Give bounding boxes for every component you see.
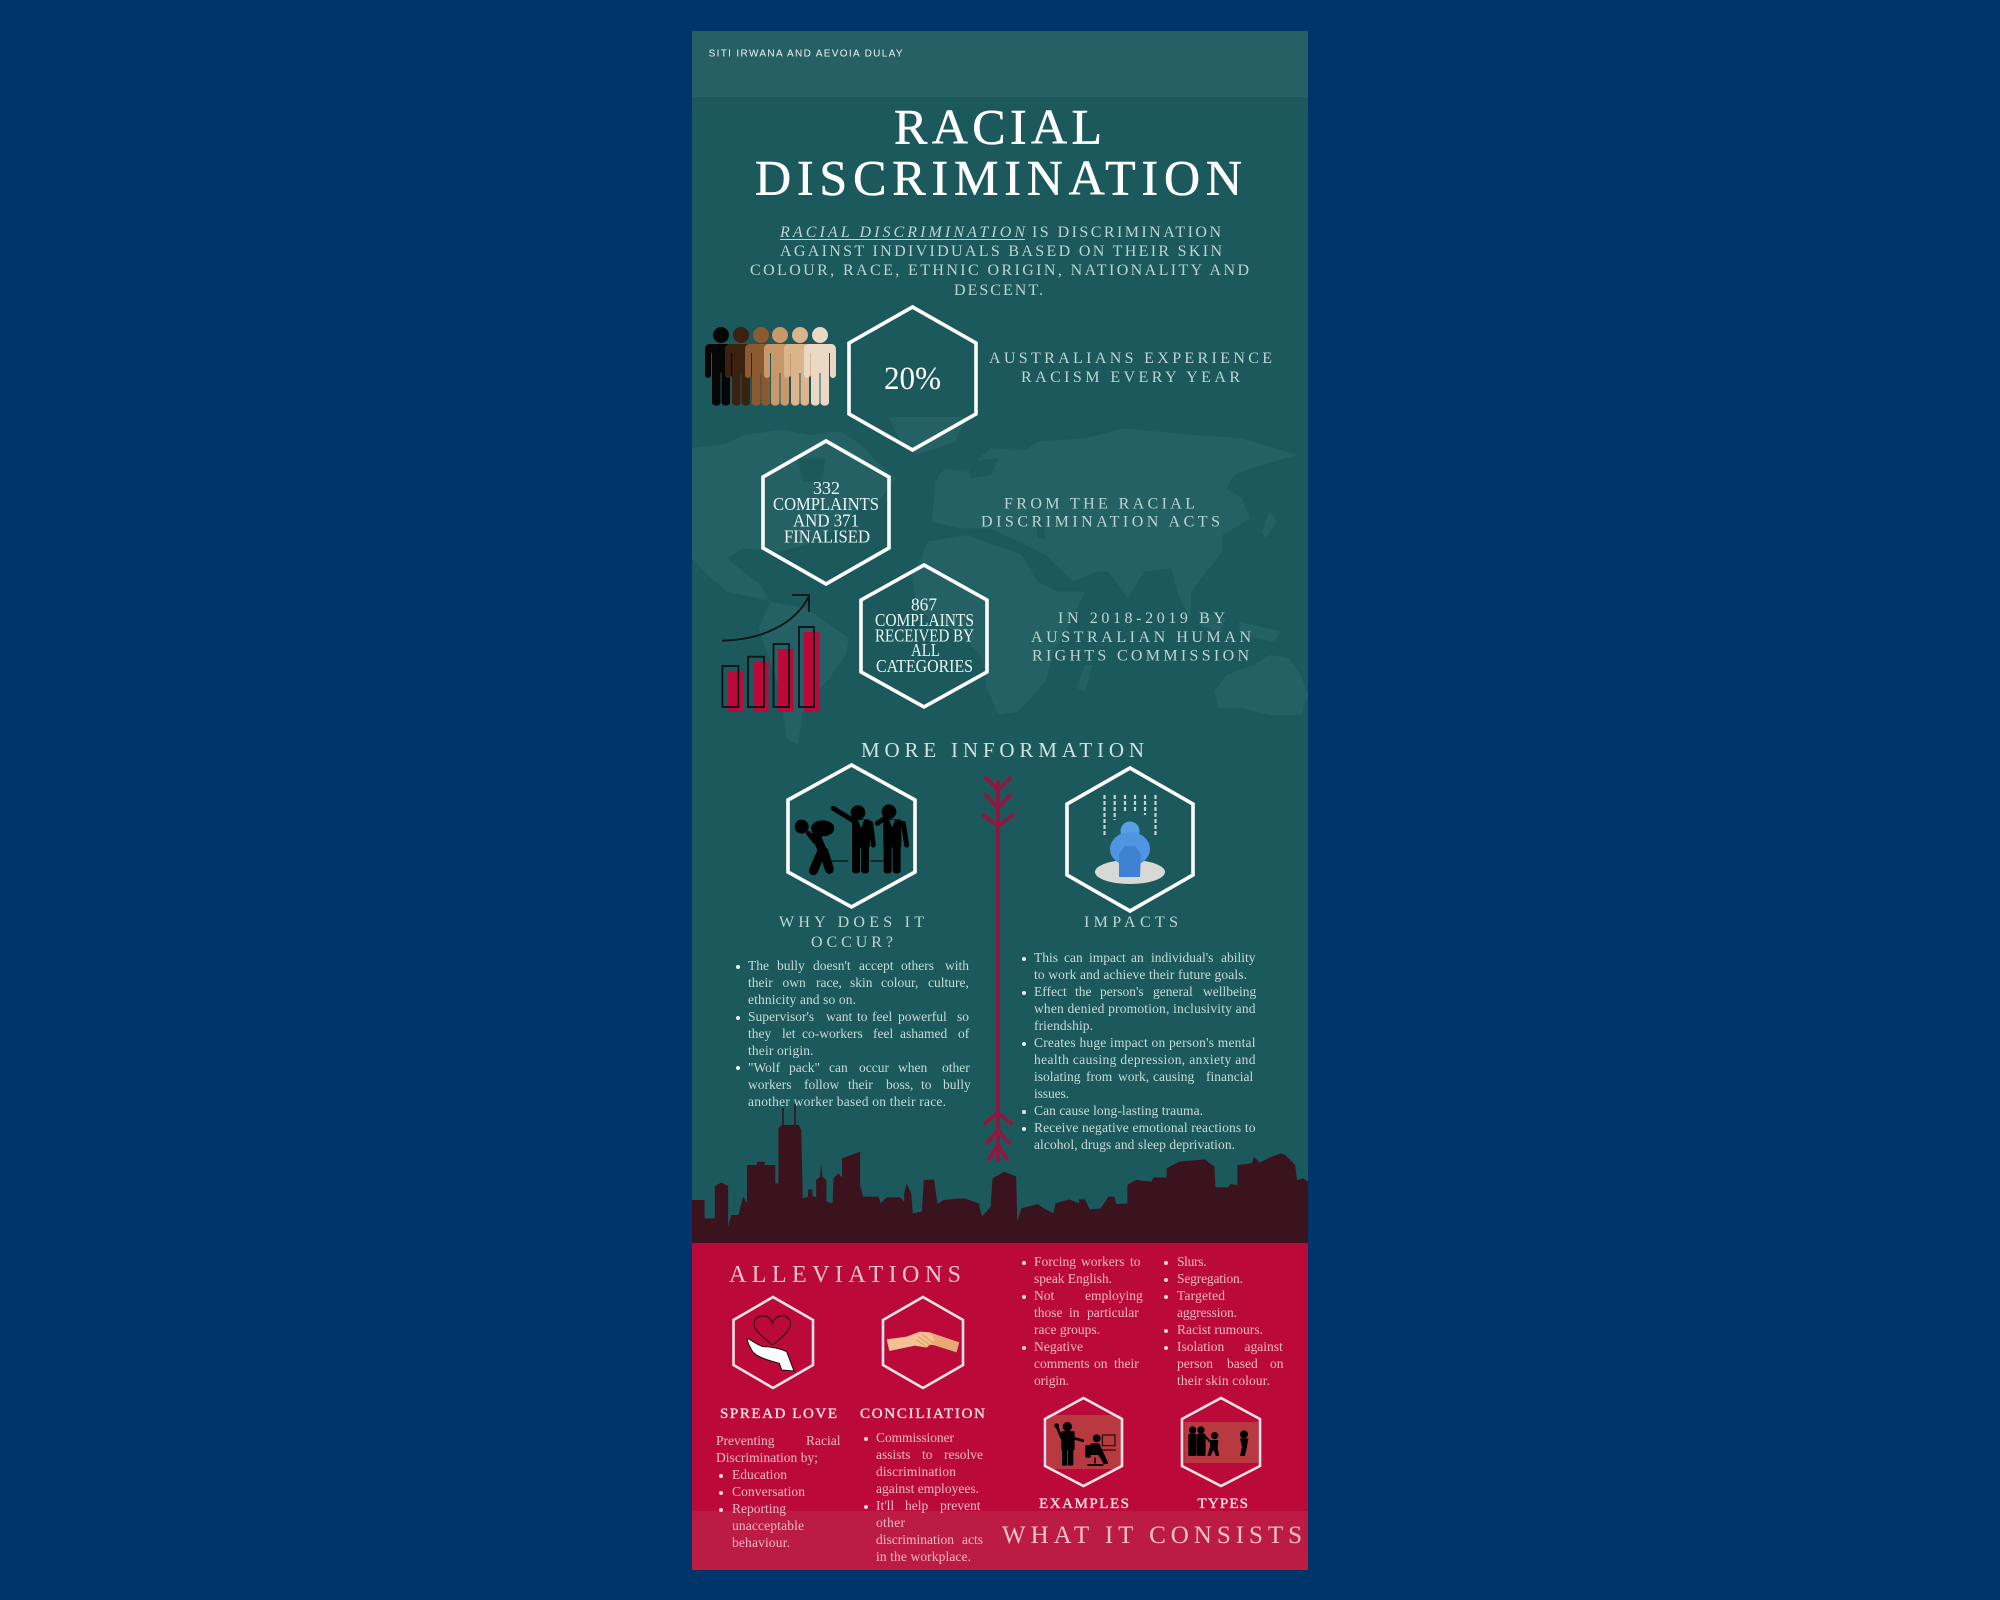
text: preventing racial discrimination: Discrimination by; bbox=[716, 1450, 818, 1465]
list: why does it occur: to bbox=[857, 1009, 868, 1024]
hexagon: 867 complaints: 867 bbox=[911, 594, 937, 614]
list: why does it occur: ashamed bbox=[900, 1026, 947, 1041]
list: conciliation: assists bbox=[876, 1447, 911, 1462]
icon: handshake bbox=[887, 1332, 959, 1352]
list: why does it occur: so bbox=[957, 1009, 969, 1024]
list: why does it occur: skin bbox=[850, 975, 873, 990]
icon: worker and boss bbox=[1054, 1422, 1116, 1466]
list: types: Isolation bbox=[1177, 1339, 1224, 1354]
heading: spread love: SPREAD LOVE bbox=[720, 1406, 837, 1422]
list: types: Racist rumours. bbox=[1177, 1322, 1263, 1337]
list: why does it occur: their bbox=[848, 1077, 873, 1092]
header band bbox=[692, 31, 1308, 97]
Madagascar bbox=[1077, 665, 1093, 692]
heading: more information: MORE INFORMATION bbox=[861, 738, 1144, 762]
hexagon icon: examples bbox=[1045, 1398, 1122, 1486]
label: from the acts: FROM THE RACIAL bbox=[1004, 496, 1195, 512]
list: why does it occur: feel bbox=[872, 1009, 892, 1024]
list: why does it occur: occur bbox=[859, 1060, 889, 1075]
list: conciliation: resolve bbox=[944, 1447, 983, 1462]
authors: SITI IRWANA AND AEVOIA DULAY bbox=[709, 48, 903, 60]
hexagon: 867 complaints: COMPLAINTS bbox=[875, 610, 974, 630]
list: why does it occur: pack" bbox=[789, 1060, 820, 1075]
list: why does it occur: powerful bbox=[898, 1009, 947, 1024]
world map bbox=[692, 417, 1308, 745]
hexagon: 332 complaints: AND 371 bbox=[793, 510, 859, 530]
text: preventing racial discrimination: Reporting bbox=[732, 1501, 786, 1516]
list: impacts: work, bbox=[1118, 1069, 1149, 1084]
hexagon: 332 complaints bbox=[763, 441, 889, 584]
list: impacts: individual's bbox=[1151, 950, 1213, 965]
list: types bbox=[1164, 1254, 1284, 1388]
list: examples: race groups. bbox=[1034, 1322, 1100, 1337]
Greenland bbox=[888, 417, 967, 455]
label: Australians experience racism bbox=[989, 350, 1272, 386]
list: impacts: when denied promotion, inclusivity and bbox=[1034, 1001, 1256, 1016]
list: conciliation: It'll bbox=[876, 1498, 894, 1513]
list: why does it occur: The bbox=[748, 958, 769, 973]
list: why does it occur: race, bbox=[816, 975, 842, 990]
list: impacts: This bbox=[1034, 950, 1058, 965]
list: impacts: general bbox=[1153, 984, 1193, 999]
Japan bbox=[1262, 512, 1277, 538]
red bars bbox=[728, 632, 820, 712]
Africa bbox=[912, 535, 1085, 715]
list: why does it occur: bully bbox=[777, 958, 805, 973]
list: impacts: wellbeing bbox=[1203, 984, 1256, 999]
list: types: their skin colour. bbox=[1177, 1373, 1270, 1388]
list: examples: to bbox=[1130, 1254, 1141, 1269]
list: examples: workers bbox=[1081, 1254, 1124, 1269]
list: conciliation: in the workplace. bbox=[876, 1549, 971, 1564]
icon: heart and hand bbox=[747, 1316, 794, 1371]
list: conciliation bbox=[864, 1430, 983, 1564]
text: preventing racial discrimination: Education bbox=[732, 1467, 787, 1482]
list: examples: those bbox=[1034, 1305, 1063, 1320]
list: examples: Not bbox=[1034, 1288, 1054, 1303]
heading: alleviations: ALLEVIATIONS bbox=[729, 1262, 961, 1288]
list: conciliation: discrimination bbox=[876, 1464, 956, 1479]
text: preventing racial discrimination: Racial bbox=[806, 1433, 841, 1448]
title: DISCRIMINATION bbox=[755, 150, 1242, 206]
label: from the acts bbox=[981, 496, 1220, 530]
list: why does it occur: when bbox=[898, 1060, 927, 1075]
label: Australians experience racism: AUSTRALIANS EXPERIENCE bbox=[989, 350, 1272, 367]
hexagon: 332 complaints: FINALISED bbox=[784, 526, 870, 546]
list: why does it occur: feel bbox=[873, 1026, 893, 1041]
list: impacts: financial bbox=[1206, 1069, 1253, 1084]
list: impacts: alcohol, drugs and sleep deprivation. bbox=[1034, 1137, 1235, 1152]
list: why does it occur: their origin. bbox=[748, 1043, 814, 1058]
list: conciliation: against employees. bbox=[876, 1481, 979, 1496]
list: examples: Negative bbox=[1034, 1339, 1083, 1354]
icon: bully figures bbox=[795, 804, 907, 873]
North America bbox=[692, 430, 896, 602]
hexagon: 332 complaints: COMPLAINTS bbox=[773, 494, 879, 514]
list: types: Slurs. bbox=[1177, 1254, 1206, 1269]
Eurasia bbox=[932, 428, 1297, 618]
definition text: RACIAL DISCRIMINATION bbox=[779, 224, 1026, 241]
list: examples: Forcing bbox=[1034, 1254, 1076, 1269]
list: why does it occur: other bbox=[942, 1060, 970, 1075]
label: from the acts: DISCRIMINATION ACTS bbox=[981, 514, 1220, 530]
definition text: AGAINST INDIVIDUALS BASED ON THEIR SKIN bbox=[780, 243, 1222, 260]
list: examples bbox=[1022, 1254, 1143, 1388]
list: why does it occur: others bbox=[901, 958, 934, 973]
list: why does it occur: ethnicity and so on. bbox=[748, 992, 856, 1007]
heading: why does it occur: WHY DOES IT bbox=[779, 914, 924, 931]
heading: what it consists: WHAT IT CONSISTS bbox=[1002, 1522, 1302, 1549]
list: why does it occur: their bbox=[748, 975, 773, 990]
hexagon icon: why does it occur bbox=[788, 765, 915, 907]
text: preventing racial discrimination bbox=[716, 1433, 841, 1550]
list: impacts: from bbox=[1086, 1069, 1113, 1084]
list: impacts: friendship. bbox=[1034, 1018, 1093, 1033]
heading: impacts: IMPACTS bbox=[1084, 914, 1178, 931]
South America bbox=[759, 602, 849, 745]
list: conciliation: prevent bbox=[940, 1498, 981, 1513]
list: types: person bbox=[1177, 1356, 1213, 1371]
list: why does it occur: they bbox=[748, 1026, 771, 1041]
icon: group harassing individuals bbox=[1188, 1426, 1248, 1456]
heading: examples: EXAMPLES bbox=[1039, 1496, 1129, 1512]
list: why does it occur: accept bbox=[859, 958, 894, 973]
list: conciliation: help bbox=[905, 1498, 928, 1513]
list: examples: in bbox=[1069, 1305, 1080, 1320]
list: impacts: an bbox=[1131, 950, 1144, 965]
text: preventing racial discrimination: Preventing bbox=[716, 1433, 775, 1448]
teal panel bbox=[692, 31, 1308, 1243]
list: impacts: causing bbox=[1153, 1069, 1194, 1084]
bar outlines bbox=[722, 627, 814, 707]
definition text: IS DISCRIMINATION bbox=[1032, 224, 1221, 241]
label: Australians experience racism: RACISM EVERY YEAR bbox=[1021, 369, 1240, 386]
list: impacts: can bbox=[1064, 950, 1083, 965]
arrow divider bbox=[983, 778, 1013, 1160]
Baltic Sea bbox=[967, 458, 998, 478]
list: why does it occur: "Wolf bbox=[748, 1060, 781, 1075]
list: why does it occur: with bbox=[945, 958, 969, 973]
list: why does it occur: bully bbox=[943, 1077, 971, 1092]
list: why does it occur: workers bbox=[748, 1077, 792, 1092]
list: examples: on bbox=[1094, 1356, 1108, 1371]
list: impacts: the bbox=[1075, 984, 1092, 999]
hexagon: 20% bbox=[849, 307, 976, 450]
islands bbox=[1199, 612, 1226, 632]
bar chart with rising arrow bbox=[722, 595, 820, 712]
hexagon icon: conciliation bbox=[883, 1297, 963, 1388]
list: impacts: impact bbox=[1089, 950, 1126, 965]
icon: row of people with different skin tones bbox=[705, 327, 836, 406]
list: impacts: person's bbox=[1100, 984, 1144, 999]
city skyline bbox=[692, 1104, 1308, 1244]
hexagon: 867 complaints: CATEGORIES bbox=[876, 656, 973, 676]
list: conciliation: Commissioner bbox=[876, 1430, 954, 1445]
list: why does it occur: follow bbox=[804, 1077, 839, 1092]
hexagon icon: types bbox=[1182, 1398, 1260, 1486]
list: why does it occur: let bbox=[782, 1026, 796, 1041]
label: in 2018-2019: IN 2018-2019 BY bbox=[1058, 610, 1225, 627]
list: why does it occur: boss, bbox=[886, 1077, 913, 1092]
hexagon: 867 complaints: ALL bbox=[911, 640, 940, 660]
definition text: COLOUR, RACE, ETHNIC ORIGIN, NATIONALITY AND bbox=[750, 262, 1249, 279]
text: preventing racial discrimination: behaviour. bbox=[732, 1535, 790, 1550]
list: why does it occur: can bbox=[829, 1060, 848, 1075]
icon: rain over person bbox=[1095, 795, 1165, 884]
hexagon icon: impacts bbox=[1067, 768, 1193, 911]
list: examples: comments bbox=[1034, 1356, 1090, 1371]
islands east bbox=[1238, 622, 1281, 642]
list: why does it occur: Supervisor's bbox=[748, 1009, 814, 1024]
label: in 2018-2019 bbox=[1031, 610, 1251, 664]
hexagon icon: spread love bbox=[734, 1297, 813, 1388]
list: examples: employing bbox=[1085, 1288, 1143, 1303]
list: why does it occur: culture, bbox=[928, 975, 969, 990]
list: impacts: Can cause long-lasting trauma. bbox=[1034, 1103, 1203, 1118]
list: why does it occur: doesn't bbox=[813, 958, 851, 973]
title: RACIAL bbox=[894, 98, 1102, 154]
list: impacts bbox=[1022, 950, 1256, 1152]
list: conciliation: to bbox=[922, 1447, 933, 1462]
list: types: on bbox=[1270, 1356, 1284, 1371]
list: conciliation: acts bbox=[962, 1532, 983, 1547]
list: impacts: Creates huge impact on person's mental bbox=[1034, 1035, 1256, 1050]
list: why does it occur bbox=[736, 958, 971, 1109]
list: impacts: health causing depression, anxiety and bbox=[1034, 1052, 1256, 1067]
list: why does it occur: co-workers bbox=[802, 1026, 863, 1041]
list: why does it occur: to bbox=[921, 1077, 932, 1092]
list: why does it occur: another worker based on their race. bbox=[748, 1094, 946, 1109]
heading: why does it occur: OCCUR? bbox=[811, 934, 893, 951]
list: why does it occur: of bbox=[958, 1026, 970, 1041]
list: impacts: issues. bbox=[1034, 1086, 1069, 1101]
list: examples: speak English. bbox=[1034, 1271, 1112, 1286]
list: impacts: isolating bbox=[1034, 1069, 1081, 1084]
hexagon: 332 complaints: 332 bbox=[813, 478, 840, 498]
text: preventing racial discrimination: Conversation bbox=[732, 1484, 805, 1499]
title bbox=[755, 98, 1242, 206]
hexagon: 20%: 20% bbox=[884, 361, 941, 397]
list: types: aggression. bbox=[1177, 1305, 1237, 1320]
hexagon: 867 complaints bbox=[861, 565, 987, 707]
heading: why does it occur bbox=[779, 914, 924, 951]
list: impacts: Effect bbox=[1034, 984, 1067, 999]
Hudson Bay bbox=[798, 458, 826, 482]
text: preventing racial discrimination: unacceptable bbox=[732, 1518, 804, 1533]
heading: types: TYPES bbox=[1198, 1496, 1248, 1512]
list: examples: their bbox=[1114, 1356, 1139, 1371]
Caspian Sea bbox=[1036, 522, 1046, 538]
list: why does it occur: colour, bbox=[881, 975, 918, 990]
lighter footer strip bbox=[692, 1511, 1308, 1570]
list: conciliation: discrimination bbox=[876, 1532, 954, 1547]
definition text: DESCENT. bbox=[954, 282, 1043, 299]
list: types: based bbox=[1227, 1356, 1258, 1371]
heading: conciliation: CONCILIATION bbox=[860, 1406, 985, 1422]
list: examples: origin. bbox=[1034, 1373, 1069, 1388]
red panel bbox=[692, 1243, 1308, 1570]
list: conciliation: other bbox=[876, 1515, 906, 1530]
list: impacts: ability bbox=[1221, 950, 1256, 965]
list: examples: particular bbox=[1087, 1305, 1139, 1320]
list: impacts: to work and achieve their future goals. bbox=[1034, 967, 1247, 982]
list: types: against bbox=[1244, 1339, 1283, 1354]
arrow bbox=[722, 595, 809, 641]
list: types: Segregation. bbox=[1177, 1271, 1243, 1286]
list: why does it occur: own bbox=[782, 975, 806, 990]
list: why does it occur: want bbox=[826, 1009, 852, 1024]
label: in 2018-2019: RIGHTS COMMISSION bbox=[1032, 648, 1249, 664]
list: types: Targeted bbox=[1177, 1288, 1225, 1303]
hexagon: 867 complaints: RECEIVED BY bbox=[875, 626, 974, 646]
list: impacts: Receive negative emotional reactions to bbox=[1034, 1120, 1256, 1135]
definition text bbox=[750, 224, 1249, 299]
Australia bbox=[1215, 655, 1308, 715]
label: in 2018-2019: AUSTRALIAN HUMAN bbox=[1031, 629, 1251, 646]
